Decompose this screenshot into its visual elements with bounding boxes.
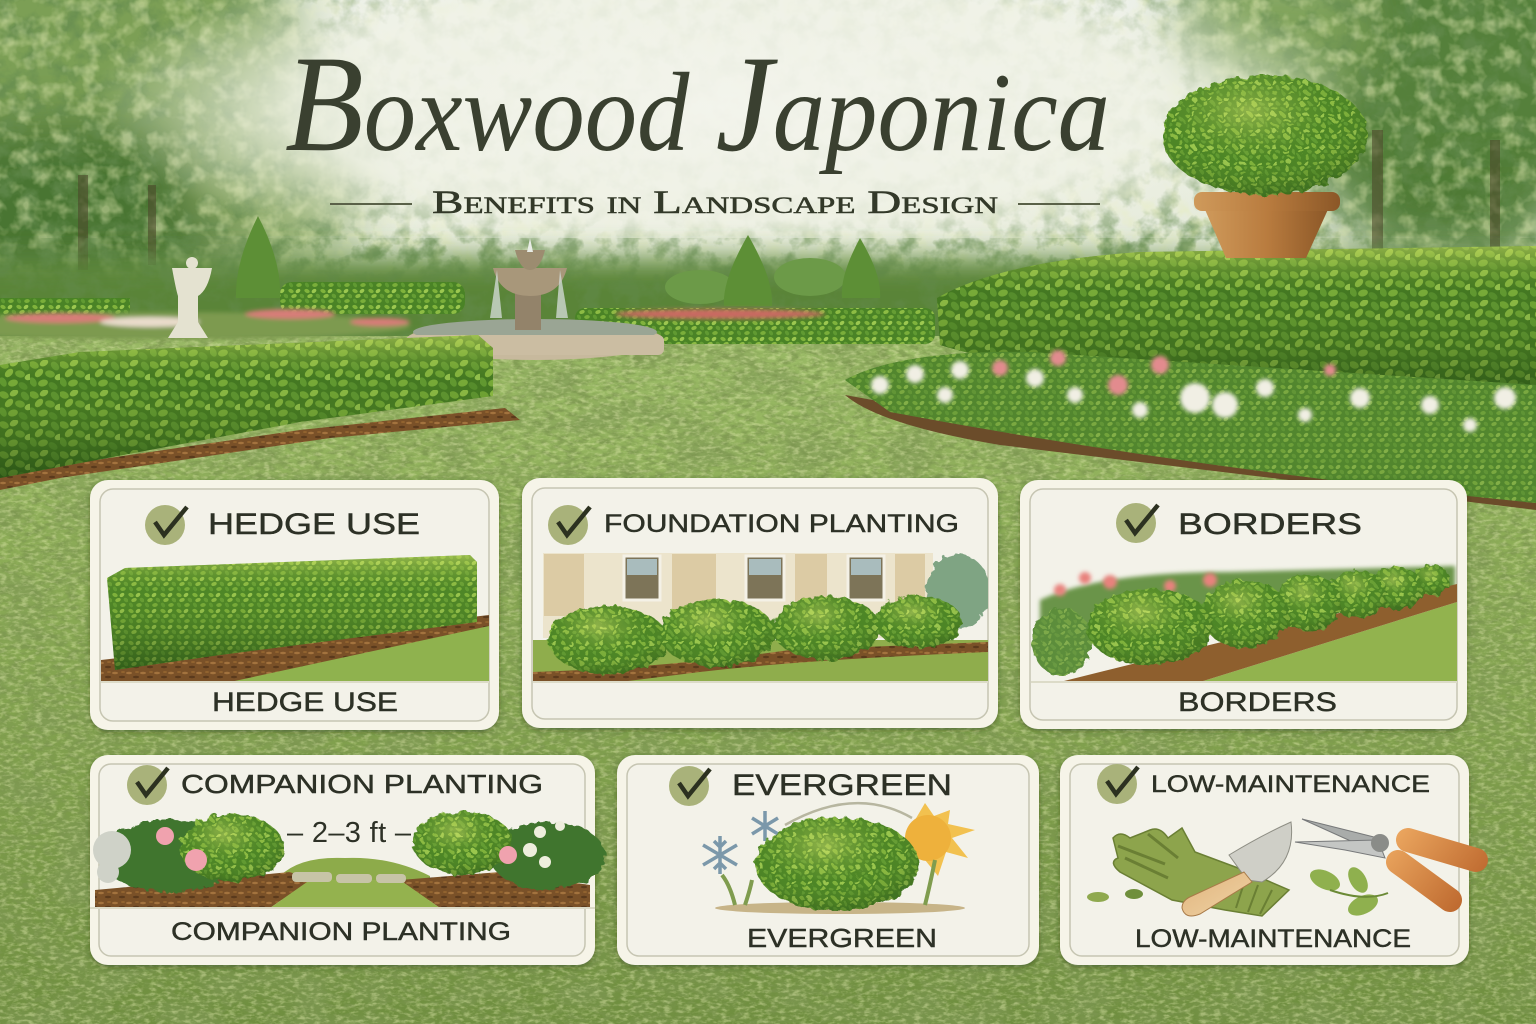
sky [0, 0, 1536, 350]
mist behind title [90, 0, 1370, 280]
lawn broad patches [0, 336, 1536, 1024]
check icon [1116, 503, 1158, 543]
caption: HEDGE USE [212, 687, 398, 717]
distant hedges [0, 258, 935, 344]
illustration: hedge [101, 555, 489, 682]
distant foliage texture [0, 238, 1536, 338]
trees right [1170, 0, 1536, 260]
panel: foundation planting [522, 478, 998, 728]
caption: LOW-MAINTENANCE [1135, 925, 1411, 953]
left hedge [0, 335, 520, 490]
seasonal arc [785, 803, 912, 825]
lawn [0, 336, 1536, 1024]
trees left [0, 0, 370, 300]
potted boxwood [1162, 75, 1368, 258]
panel: evergreen [617, 755, 1039, 965]
heading: BORDERS [1178, 508, 1362, 541]
check icon [145, 505, 187, 545]
flower bed [845, 350, 1536, 503]
check icon [548, 505, 590, 545]
check icon [127, 765, 168, 805]
subtitle rules [330, 203, 1100, 205]
icon: trowel [1182, 822, 1292, 916]
lawn texture [0, 336, 1536, 1024]
distant tree line [0, 258, 1536, 358]
panel: borders [1020, 480, 1467, 729]
illustration: companion plants [93, 811, 606, 908]
heading: COMPANION PLANTING [181, 769, 543, 799]
foliage highlights [0, 0, 1536, 320]
panel: hedge use [90, 480, 499, 730]
check icon [1097, 764, 1138, 804]
check icon [669, 766, 710, 806]
caption: BORDERS [1178, 687, 1337, 717]
spacing label: – 2–3 ft – [287, 817, 412, 849]
caption: COMPANION PLANTING [171, 918, 511, 946]
title: Boxwood Japonica [285, 27, 1110, 180]
illustration: house and shrubs [533, 553, 990, 682]
flower beds far [0, 309, 825, 340]
icon: leaves [1307, 864, 1388, 920]
fountain [406, 238, 664, 360]
icon: gardening gloves [1087, 828, 1289, 916]
tree trunks [78, 130, 1500, 270]
caption: EVERGREEN [747, 923, 937, 953]
foliage texture [0, 0, 1536, 320]
heading: EVERGREEN [732, 769, 952, 802]
panel: companion planting [90, 755, 606, 965]
subtitle: Benefits in Landscape Design [432, 185, 999, 221]
icon: sun [905, 803, 975, 876]
icon: snowflakes [703, 811, 778, 874]
image divider [533, 681, 988, 683]
urn [168, 257, 212, 338]
icon: pruners [1295, 819, 1476, 900]
cone topiaries [236, 216, 880, 306]
image divider [90, 907, 595, 909]
lawn highlights [0, 336, 1536, 1024]
illustration: evergreen shrub [715, 817, 965, 914]
heading: LOW-MAINTENANCE [1151, 771, 1430, 798]
heading: HEDGE USE [208, 508, 420, 541]
mulch under flower bed [845, 395, 1536, 510]
right hedge [937, 246, 1536, 398]
image divider [1031, 681, 1457, 683]
panel: low-maintenance [1060, 755, 1476, 965]
image divider [101, 681, 489, 683]
illustration: border row [1032, 565, 1457, 682]
heading: FOUNDATION PLANTING [604, 510, 959, 538]
